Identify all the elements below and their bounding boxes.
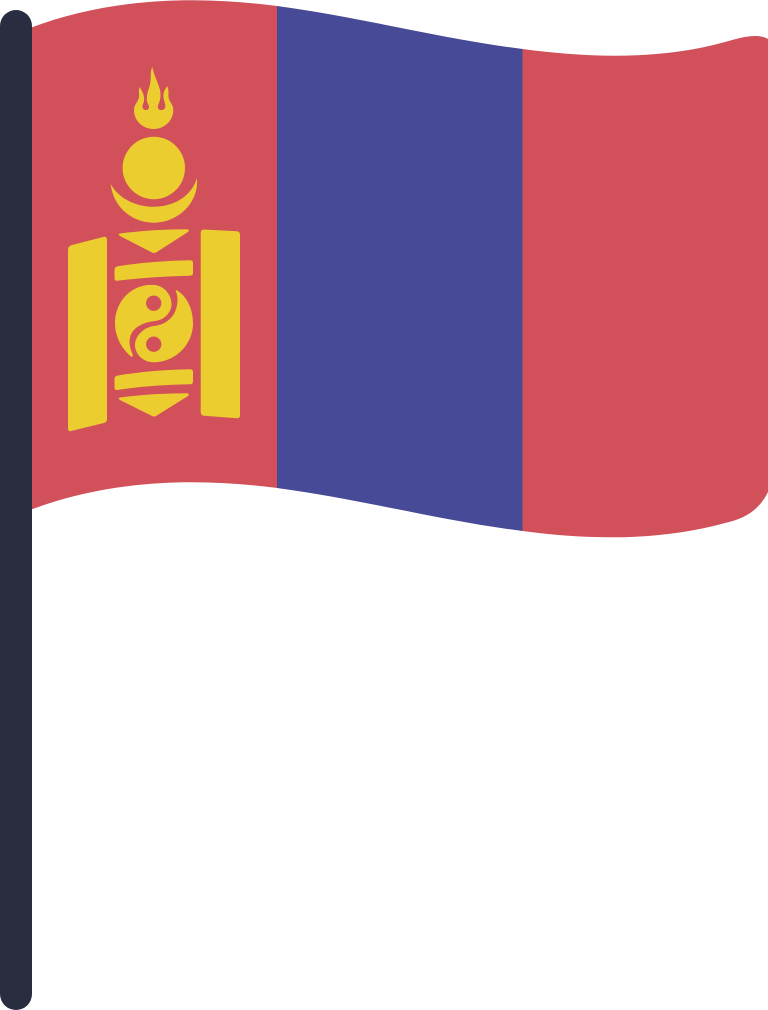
lower bar xyxy=(114,369,193,390)
yin-yang left half xyxy=(115,285,172,357)
lower triangle xyxy=(119,393,189,416)
soyombo emblem xyxy=(68,67,240,431)
flagpole xyxy=(0,10,32,1010)
crescent moon xyxy=(111,178,197,223)
left red stripe xyxy=(30,0,278,510)
flame xyxy=(134,67,173,129)
yin-yang right half xyxy=(135,290,193,362)
right red stripe xyxy=(522,36,768,537)
right pillar xyxy=(201,230,240,418)
left pillar xyxy=(68,237,107,431)
centre blue stripe xyxy=(277,6,523,531)
upper triangle xyxy=(119,229,189,253)
sun disc xyxy=(123,137,185,199)
upper bar xyxy=(114,260,193,281)
